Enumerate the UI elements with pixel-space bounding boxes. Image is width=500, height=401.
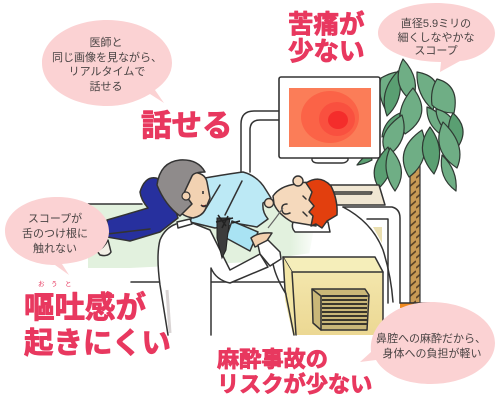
patient xyxy=(97,172,337,256)
pillow xyxy=(292,222,330,232)
equipment box xyxy=(283,257,383,335)
doctor collar xyxy=(177,219,192,228)
bubble text: 細くしなやかな xyxy=(398,30,474,44)
speech bubble: anesthesia xyxy=(360,302,495,384)
patient legs xyxy=(107,178,178,241)
heading: less gag reflex: 嘔吐感が xyxy=(24,290,146,325)
speech bubble: gag xyxy=(5,197,109,275)
patient hand xyxy=(251,233,272,247)
monitor xyxy=(279,77,380,163)
doctor face xyxy=(176,172,210,218)
box vent xyxy=(312,289,369,330)
monitor screen xyxy=(289,88,371,147)
patient hair xyxy=(306,179,337,228)
monitor stand xyxy=(312,158,348,163)
heading: less pain: 苦痛が xyxy=(288,10,365,39)
patient foot xyxy=(97,240,111,256)
heading: talk: 話せる xyxy=(141,109,232,143)
bubble shape xyxy=(42,20,172,106)
bubble shape xyxy=(378,3,495,72)
plant leaves xyxy=(357,59,463,191)
bed frame xyxy=(88,204,430,303)
bubble text: 舌のつけ根に xyxy=(22,227,88,240)
doctor hair xyxy=(157,160,205,216)
box front xyxy=(292,272,383,335)
scope cable xyxy=(273,264,286,294)
heading: less pain: 少ない xyxy=(288,38,365,66)
plant pot edge xyxy=(400,303,414,308)
bubble text: スコープ xyxy=(414,44,458,57)
doctor eye and mouth xyxy=(201,191,206,206)
ruby: おうと: お xyxy=(38,280,45,288)
patient head xyxy=(273,182,318,226)
bubble text xyxy=(398,17,474,57)
bubble shape xyxy=(5,197,109,275)
ruby: おうと xyxy=(38,280,72,288)
heading: anesthesia risk: リスクが少ない xyxy=(217,371,372,397)
endoscope handle xyxy=(216,215,240,258)
bubble text: 鼻腔への麻酔だから、 xyxy=(376,331,486,345)
bubble text: 直径5.9ミリの xyxy=(401,17,471,30)
monitor arm xyxy=(241,111,280,172)
heading: less pain xyxy=(288,10,365,66)
bubble text: スコープが xyxy=(28,211,82,225)
bubble text: 同じ画像を見ながら、 xyxy=(52,50,162,64)
heading: less gag reflex: 起きにくい xyxy=(24,327,171,360)
heading: anesthesia risk xyxy=(217,347,372,397)
bubble text: 身体への負担が軽い xyxy=(382,346,482,360)
bubble text: 医師と xyxy=(90,36,122,49)
monitor housing xyxy=(279,77,380,158)
patient torso xyxy=(190,172,271,228)
speech bubble: talk xyxy=(42,20,172,106)
bubble text: 話せる xyxy=(90,80,122,93)
heading: anesthesia risk: 麻酔事故の xyxy=(217,347,328,372)
heading: less gag reflex xyxy=(24,290,171,360)
patient arm xyxy=(226,221,258,251)
speech bubble: scope xyxy=(378,3,495,72)
headrest xyxy=(330,185,385,205)
bubble text xyxy=(376,331,486,360)
ruby: おうと: と xyxy=(65,280,72,288)
doctor xyxy=(157,160,286,335)
plant xyxy=(357,59,463,308)
bed surface xyxy=(88,204,318,268)
doctor ear xyxy=(182,192,190,200)
bubble text: 触れない xyxy=(33,241,77,255)
bubble text: リアルタイムで xyxy=(69,65,145,78)
doctor glove xyxy=(258,240,281,266)
nasal scope tube xyxy=(268,208,283,228)
ruby: おうと: う xyxy=(51,280,58,288)
plant trunk xyxy=(410,165,420,303)
bubble text xyxy=(22,211,88,255)
bubble shape xyxy=(360,302,495,384)
box side xyxy=(283,257,296,335)
bubble text xyxy=(52,36,162,93)
doctor coat xyxy=(158,222,268,335)
box top xyxy=(283,257,383,272)
